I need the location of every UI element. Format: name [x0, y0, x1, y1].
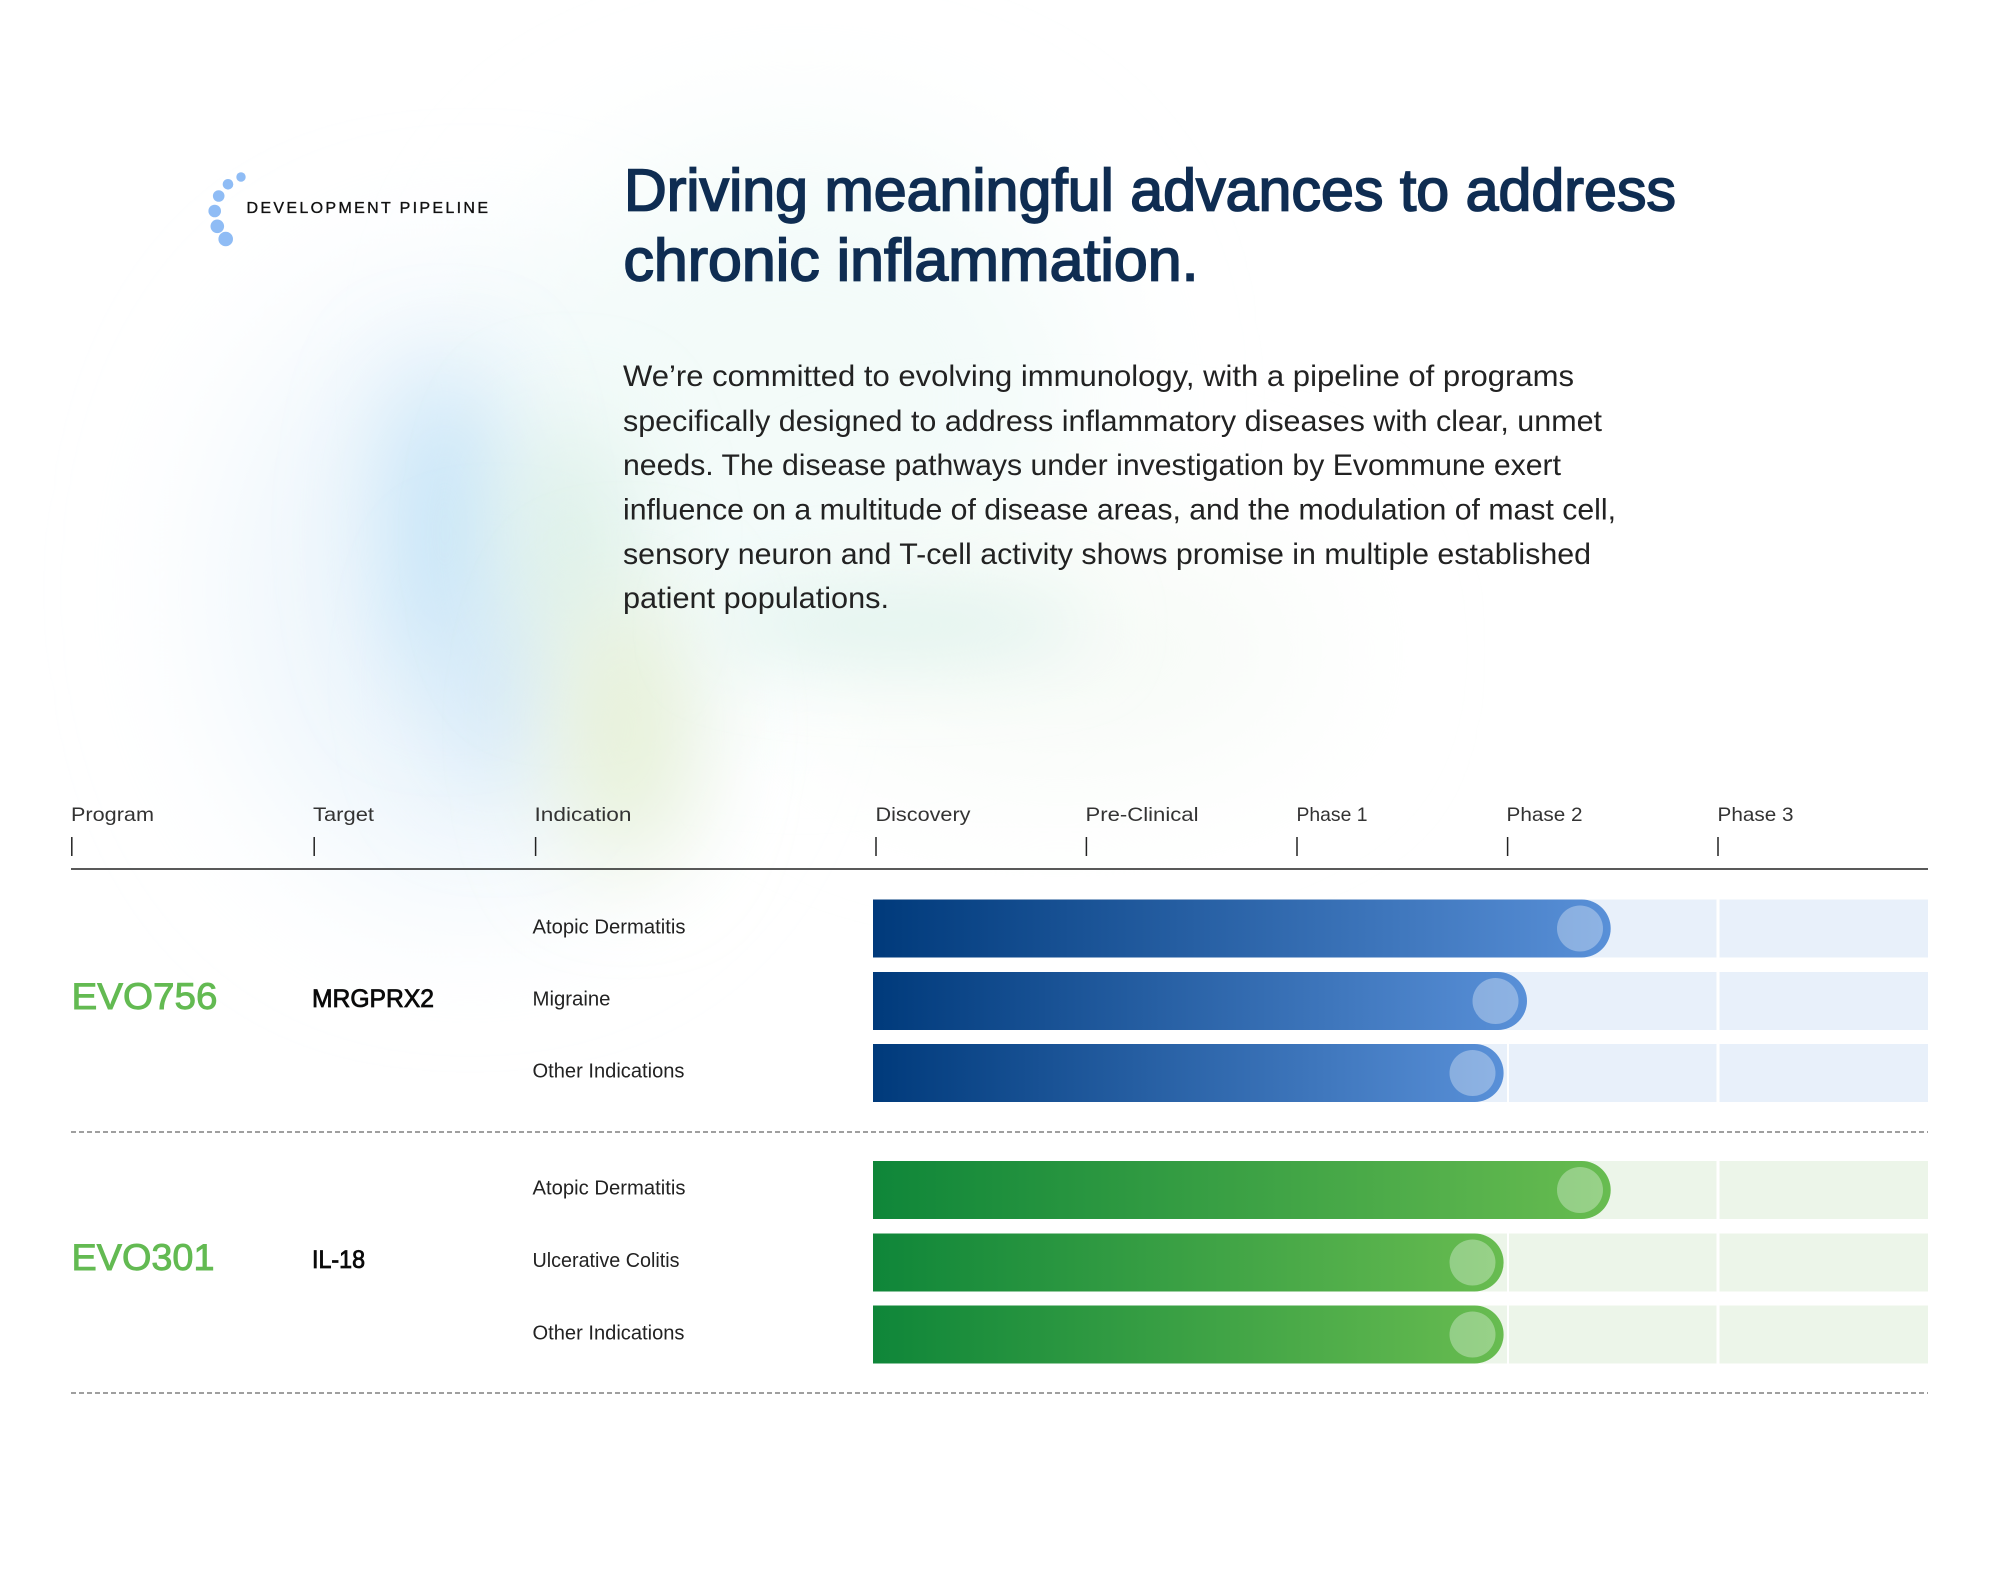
indication labels: Other Indications	[532, 1322, 684, 1344]
table header: Pre-Clinical	[1086, 804, 1198, 826]
title	[624, 158, 1676, 294]
indication labels: Ulcerative Colitis	[532, 1249, 680, 1272]
background glow	[220, 140, 1320, 900]
program row: EVO301	[72, 1161, 1928, 1364]
bar: Other Indications, through Phase 1	[873, 1306, 1928, 1364]
table header: Program	[71, 804, 154, 826]
title: chronic inflammation.	[624, 228, 1198, 294]
title: Driving meaningful advances to address	[624, 158, 1676, 224]
body text: needs. The disease pathways under investigation by Evommune exert	[623, 449, 1562, 482]
table header: Discovery	[876, 804, 971, 826]
section label: DEVELOPMENT PIPELINE	[246, 200, 488, 217]
target: IL-18	[312, 1246, 365, 1274]
icon: arc of dots	[208, 172, 246, 246]
indication labels	[532, 1176, 686, 1344]
indication labels: Migraine	[532, 988, 610, 1010]
bar: Atopic Dermatitis, into Phase 2	[873, 900, 1928, 958]
table header: Phase 2	[1506, 804, 1582, 826]
indication labels: Other Indications	[532, 1060, 684, 1082]
bar: Migraine, into Phase 2	[873, 972, 1928, 1030]
table header: Phase 3	[1718, 804, 1794, 826]
bar: Atopic Dermatitis, into Phase 2	[873, 1161, 1928, 1219]
body text	[623, 360, 1616, 615]
indication labels: Atopic Dermatitis	[532, 1176, 686, 1200]
body text: patient populations.	[623, 582, 889, 615]
body text: sensory neuron and T-cell activity shows promise in multiple established	[623, 538, 1591, 571]
target: MRGPRX2	[312, 985, 434, 1013]
table header: Indication	[534, 804, 632, 826]
logo and section label	[208, 172, 488, 246]
indication labels	[532, 916, 686, 1082]
body text: specifically designed to address inflammatory diseases with clear, unmet	[623, 405, 1603, 438]
table header: Phase 1	[1296, 804, 1368, 826]
bar: Ulcerative Colitis, through Phase 1	[873, 1234, 1928, 1292]
table header	[71, 804, 1928, 869]
bar: Other Indications, through Phase 1	[873, 1044, 1928, 1102]
body text: influence on a multitude of disease areas, and the modulation of mast cell,	[623, 494, 1616, 526]
table header: Target	[313, 804, 375, 826]
program name: EVO301	[72, 1237, 214, 1278]
program row: EVO756	[72, 900, 1928, 1102]
indication labels: Atopic Dermatitis	[532, 916, 686, 938]
body text: We’re committed to evolving immunology, with a pipeline of programs	[623, 360, 1574, 393]
program name: EVO756	[72, 976, 218, 1017]
